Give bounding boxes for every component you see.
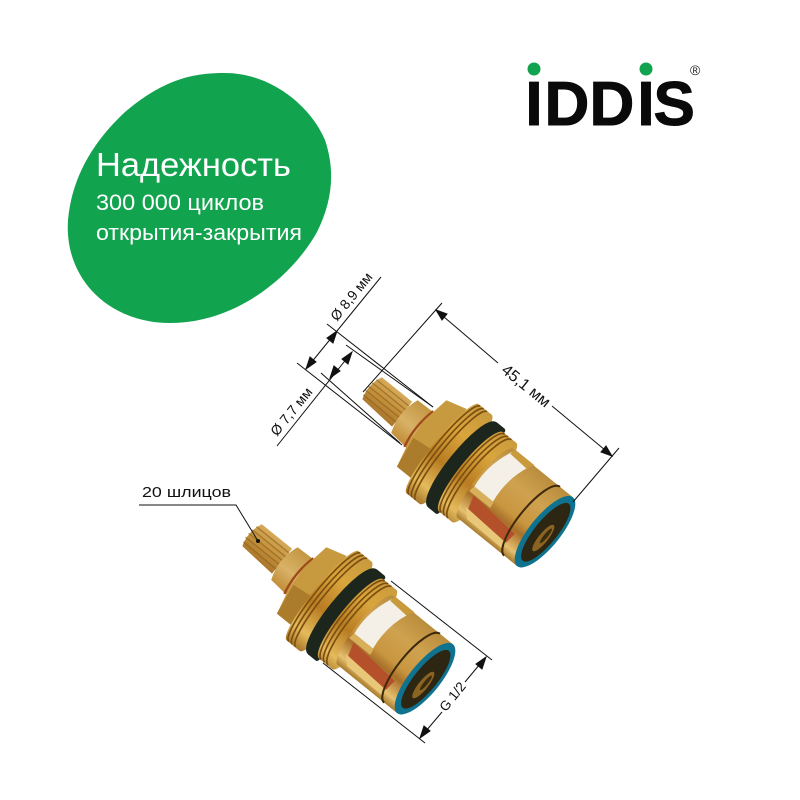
callout: 20 splines bbox=[139, 484, 260, 542]
text: open-close: открытия-закрытия bbox=[96, 220, 302, 245]
callout: 20 splines: 20 шлицов bbox=[142, 484, 231, 501]
cartridge: lower bbox=[211, 490, 473, 733]
dimension: diameter 7,7 mm: Ø 7,7 мм bbox=[267, 384, 315, 439]
dimension: diameter 7,7 mm bbox=[267, 345, 433, 446]
blob shape bbox=[68, 73, 331, 323]
text: cycles count: 300 000 циклов bbox=[96, 190, 264, 215]
dimension: G 1/2: G 1/2 bbox=[436, 679, 469, 714]
green blob: reliability bbox=[68, 73, 331, 323]
logo wordmark: IDDIS bbox=[525, 70, 695, 139]
dimension: diameter 8,9 mm: Ø 8,9 мм bbox=[327, 269, 375, 324]
dimension: G 1/2 bbox=[323, 581, 492, 743]
logo dot right bbox=[640, 62, 652, 76]
cartridge: upper bbox=[331, 343, 593, 586]
registered mark: ® bbox=[690, 62, 701, 78]
dimension: diameter 8,9 mm bbox=[297, 269, 433, 445]
logo dot left bbox=[528, 62, 540, 76]
heading: reliability: Надежность bbox=[96, 146, 291, 183]
dimension: 45,1 mm bbox=[363, 303, 619, 502]
logo: IDDIS bbox=[525, 62, 701, 139]
dimension: 45,1 mm: 45,1 мм bbox=[498, 362, 553, 411]
